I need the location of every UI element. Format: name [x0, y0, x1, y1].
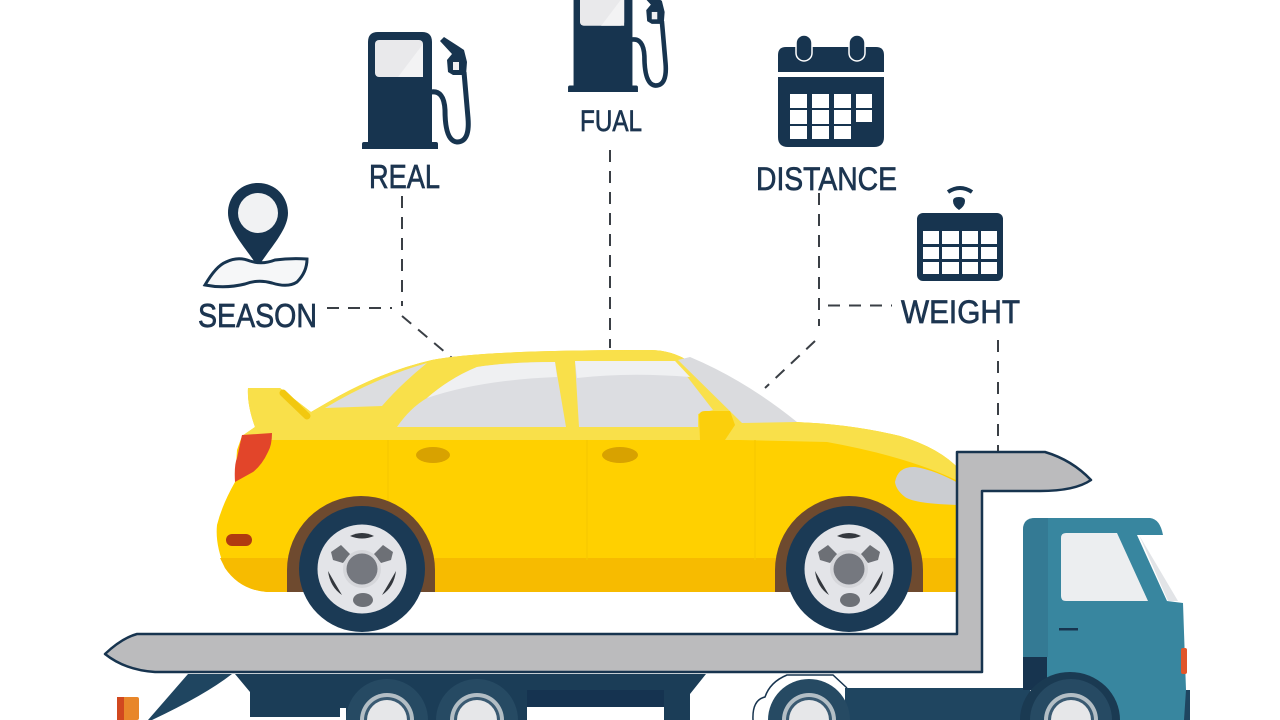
tail light — [235, 433, 272, 482]
flatbed deck — [105, 452, 1091, 672]
label: WEIGHT: WEIGHT — [901, 294, 1020, 330]
label: REAL: REAL — [369, 158, 440, 195]
windshield — [678, 357, 797, 423]
truck cab — [1020, 518, 1190, 720]
side window — [1061, 533, 1148, 601]
marker light — [1181, 648, 1187, 674]
truck chassis — [117, 674, 1030, 720]
label: SEASON: SEASON — [198, 297, 317, 334]
icon: fuel pump real — [362, 32, 468, 149]
door seams — [388, 440, 755, 560]
cab body — [1023, 518, 1186, 720]
bumper — [1180, 690, 1190, 720]
cab underside — [1023, 650, 1053, 690]
car wheels — [299, 506, 425, 632]
spoiler fin — [283, 393, 307, 416]
label: FUAL: FUAL — [580, 105, 642, 138]
mirror — [699, 411, 735, 440]
door handle — [1059, 628, 1078, 630]
front window — [575, 361, 713, 427]
rear reflector — [226, 534, 252, 546]
icon: small calendar with signal — [917, 188, 1003, 281]
rocker band — [220, 558, 958, 592]
front wheel arch — [1020, 672, 1120, 720]
label: DISTANCE: DISTANCE — [756, 161, 897, 197]
icon: fuel pump fual — [568, 0, 666, 92]
rear window — [397, 362, 566, 427]
upper body highlight — [242, 350, 960, 482]
icon: calendar — [778, 35, 884, 147]
car body — [217, 350, 960, 592]
icon: map pin — [205, 183, 307, 287]
front wheel — [1030, 679, 1112, 720]
dashed connectors — [327, 150, 998, 452]
rear quarter glass — [325, 363, 427, 408]
windshield sliver — [1139, 535, 1178, 601]
door handles — [416, 447, 450, 463]
wheel arches — [287, 496, 435, 592]
trailer wheels — [346, 679, 518, 720]
headlight — [895, 467, 960, 505]
yellow car — [217, 350, 960, 632]
rear drive wheel — [753, 675, 850, 720]
